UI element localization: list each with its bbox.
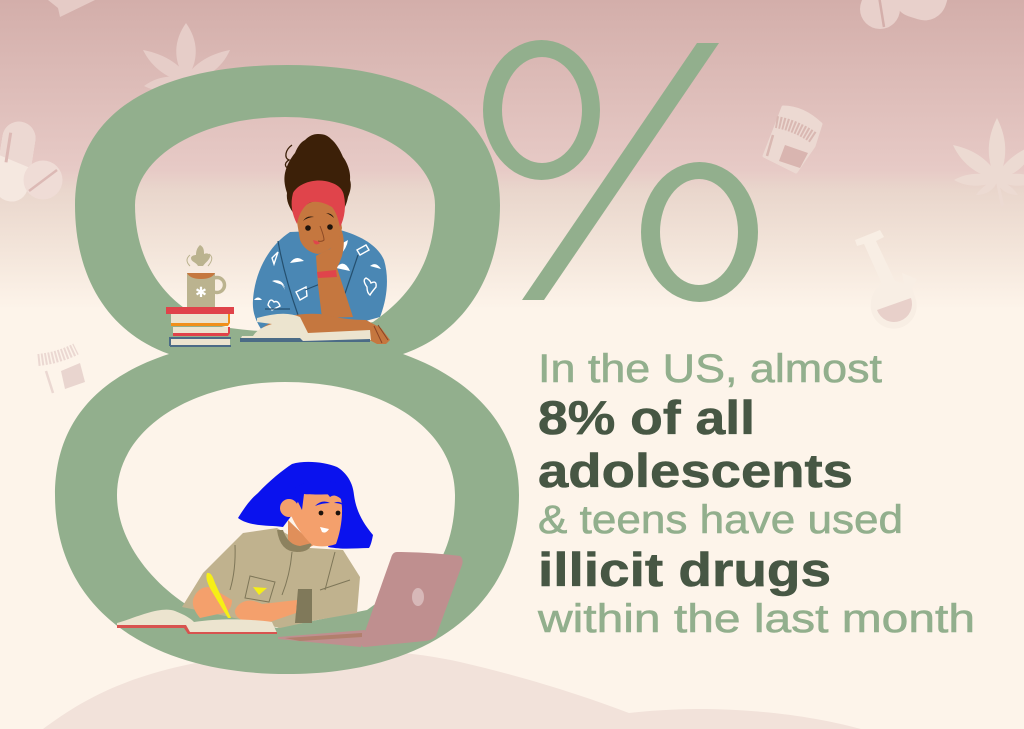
jacket collar bbox=[277, 530, 312, 552]
forearm on desk bbox=[262, 314, 390, 344]
face bbox=[291, 492, 342, 546]
line 2: 8% of all bbox=[538, 391, 755, 444]
icon: bong bbox=[855, 230, 917, 329]
fingers bbox=[374, 325, 388, 343]
icon: capsule and tablet left bbox=[0, 119, 63, 204]
arm and hand supporting head bbox=[316, 229, 353, 318]
icon: pills top right bbox=[860, 0, 953, 29]
icon: cannabis leaf top left bbox=[143, 23, 230, 91]
headband bbox=[292, 181, 345, 227]
open notebook bbox=[117, 610, 277, 633]
shirt bbox=[253, 230, 387, 332]
caption text bbox=[537, 347, 975, 641]
line 5: illicit drugs bbox=[538, 543, 831, 596]
hair bbox=[238, 462, 373, 549]
line 3: adolescents bbox=[538, 444, 853, 497]
hair bbox=[284, 134, 351, 215]
shirt lines bbox=[265, 241, 358, 315]
line 1: In the US, almost bbox=[538, 347, 882, 391]
line 6: within the last month bbox=[537, 597, 975, 641]
yellow pen bbox=[206, 573, 231, 618]
percent sign bbox=[483, 40, 758, 302]
illustration: coffee mug: ✱ bbox=[195, 285, 207, 301]
jacket bbox=[182, 528, 360, 628]
line 4: & teens have used bbox=[538, 498, 903, 542]
eyes and brows bbox=[319, 511, 340, 515]
sleeve cuff bbox=[295, 589, 312, 623]
mouth bbox=[313, 240, 320, 244]
shirt pattern bbox=[254, 240, 381, 300]
ear bbox=[280, 499, 298, 517]
nose bbox=[318, 226, 324, 241]
jacket pocket and details bbox=[230, 545, 350, 602]
laptop bbox=[278, 552, 463, 647]
icon: pill fragment top left bbox=[48, 0, 95, 17]
icon: pill bottle right bbox=[764, 107, 821, 172]
face bbox=[297, 200, 342, 254]
shirt leaves bbox=[268, 245, 376, 310]
icon: cannabis leaf right bbox=[953, 118, 1024, 207]
fringe bbox=[292, 480, 345, 510]
illustration: coffee mug bbox=[187, 245, 224, 307]
illustration: woman with blue hair writing bbox=[117, 462, 463, 647]
open book bbox=[240, 314, 371, 342]
right hand on notebook bbox=[235, 600, 297, 623]
left hand writing bbox=[193, 587, 232, 618]
bracelet bbox=[317, 270, 337, 278]
yellow pocket mark bbox=[253, 587, 267, 595]
bottom hills bbox=[43, 650, 861, 729]
neck bbox=[288, 520, 314, 552]
illustration: stack of books bbox=[166, 307, 234, 347]
illustration: woman with headband reading bbox=[240, 134, 390, 344]
icon: pill bottle left bbox=[38, 349, 85, 393]
facial features bbox=[303, 213, 334, 231]
curl bbox=[285, 145, 292, 168]
smile bbox=[320, 527, 329, 533]
